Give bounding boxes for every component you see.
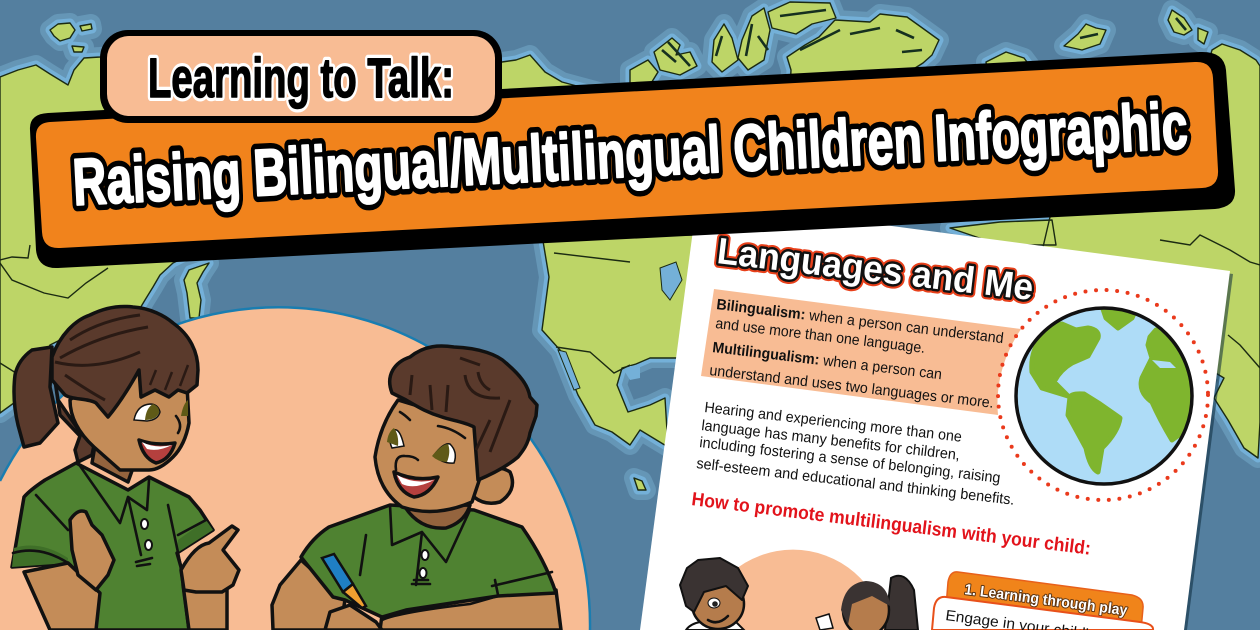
heading: Languages and Me: Languages and Me [715,230,1036,308]
girl arm right [183,585,227,630]
boy arm right [380,590,561,630]
girl hair [52,306,198,417]
step heading: 1. Learning through play [963,581,1129,619]
subtitle text [148,46,454,109]
girl arm left [24,563,100,630]
illustration: girl talking [12,306,239,630]
girl hand right pointing [181,526,239,592]
definitions panel: Bilingualism: when a person can understand [716,296,1005,347]
girl ponytail [14,347,58,447]
boy ear [474,468,512,503]
boy face [375,400,480,511]
text block: benefits: language has many benefits for children, [701,417,961,464]
icon: globe with dotted ring [998,290,1208,500]
text block: benefits [696,399,1015,509]
subtitle text: Learning to Talk: [148,46,454,109]
title banner [30,52,1235,268]
panel: large peach circle [0,307,590,630]
girl neck [92,440,134,482]
subheading: how to promote: How to promote multilingualism with your child: [690,489,1092,560]
subtitle text: Learning to Talk: [148,46,454,109]
definitions panel: and use more than one language. [715,315,926,357]
boy hand [325,605,382,630]
illustration: boy writing [272,346,561,630]
boy neck [405,505,470,528]
definitions panel: Multilingualism: when a person can [712,339,943,383]
definitions panel [701,289,1021,415]
step body [932,597,1153,630]
boy shirt [301,505,556,617]
text block: benefits: including fostering a sense of belonging, raising [699,434,1001,487]
subtitle tag [100,30,502,123]
girl face [70,360,189,470]
illustration: two children in peach circle [680,550,918,630]
boy hair [390,346,537,480]
world map background [0,2,1260,490]
text block: benefits: self-esteem and educational and thinking benefits. [696,455,1015,509]
boy pen [322,554,366,608]
definitions panel: understand and uses two languages or more. [709,362,995,412]
boy arm left [272,560,345,630]
panel: worksheet preview page [640,200,1233,630]
text block: benefits: Hearing and experiencing more than one [704,399,963,446]
heading: Languages and Me: Languages and Me [715,230,1036,308]
girl shirt [12,463,213,630]
step card: learning through play [932,572,1153,630]
girl hand left [70,511,114,590]
girl back hair [52,360,95,462]
